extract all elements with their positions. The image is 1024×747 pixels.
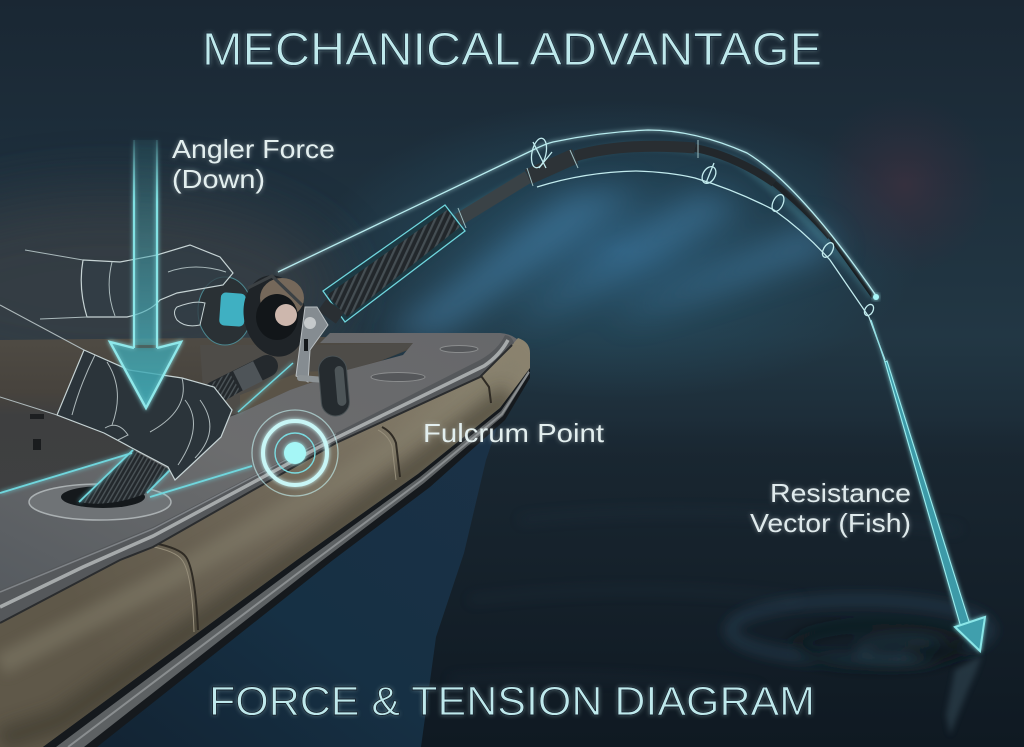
- padded cushion: [0, 330, 540, 747]
- label: angler force: Angler Force: [172, 134, 335, 164]
- rod glow: [332, 146, 873, 307]
- label: resistance vector: Resistance: [770, 478, 911, 508]
- rod holder: [29, 484, 171, 520]
- label: fulcrum point: Fulcrum Point: [423, 418, 605, 448]
- deck fittings: [371, 346, 478, 382]
- lower chrome strip: [43, 368, 530, 747]
- rod tip glow: [873, 294, 879, 300]
- upper hand: [25, 245, 233, 326]
- fish reflection: [946, 655, 982, 735]
- cushion seams: [153, 373, 491, 630]
- boat interior wall: [0, 336, 420, 496]
- lower hand: [0, 305, 232, 480]
- subtitle: FORCE & TENSION DIAGRAM: [209, 678, 815, 724]
- deck surface: [0, 333, 522, 595]
- rod guides and construction lines: [278, 130, 885, 360]
- arrow: angler force down: [110, 140, 181, 408]
- rod section to reel: [208, 363, 293, 412]
- label: angler force: [172, 134, 335, 194]
- chrome rail: [0, 335, 514, 623]
- fulcrum leader line: [310, 452, 604, 454]
- arrow: resistance vector: [871, 320, 985, 651]
- interior details: [30, 343, 413, 450]
- reel: [198, 269, 351, 417]
- title: MECHANICAL ADVANTAGE: [202, 23, 822, 75]
- label: angler force: (Down): [172, 164, 265, 194]
- label: resistance vector: [750, 478, 911, 538]
- boat hull: [60, 410, 503, 747]
- foregrip: [327, 210, 460, 317]
- fulcrum target: [252, 410, 338, 496]
- thread: [322, 305, 340, 318]
- rod butt in holder: [79, 450, 170, 504]
- foregrip outline: [323, 205, 465, 322]
- neon deck lines: [0, 450, 252, 502]
- water ripples: [730, 600, 990, 665]
- label: resistance vector: Vector (Fish): [750, 508, 911, 538]
- rod blank: [322, 140, 873, 322]
